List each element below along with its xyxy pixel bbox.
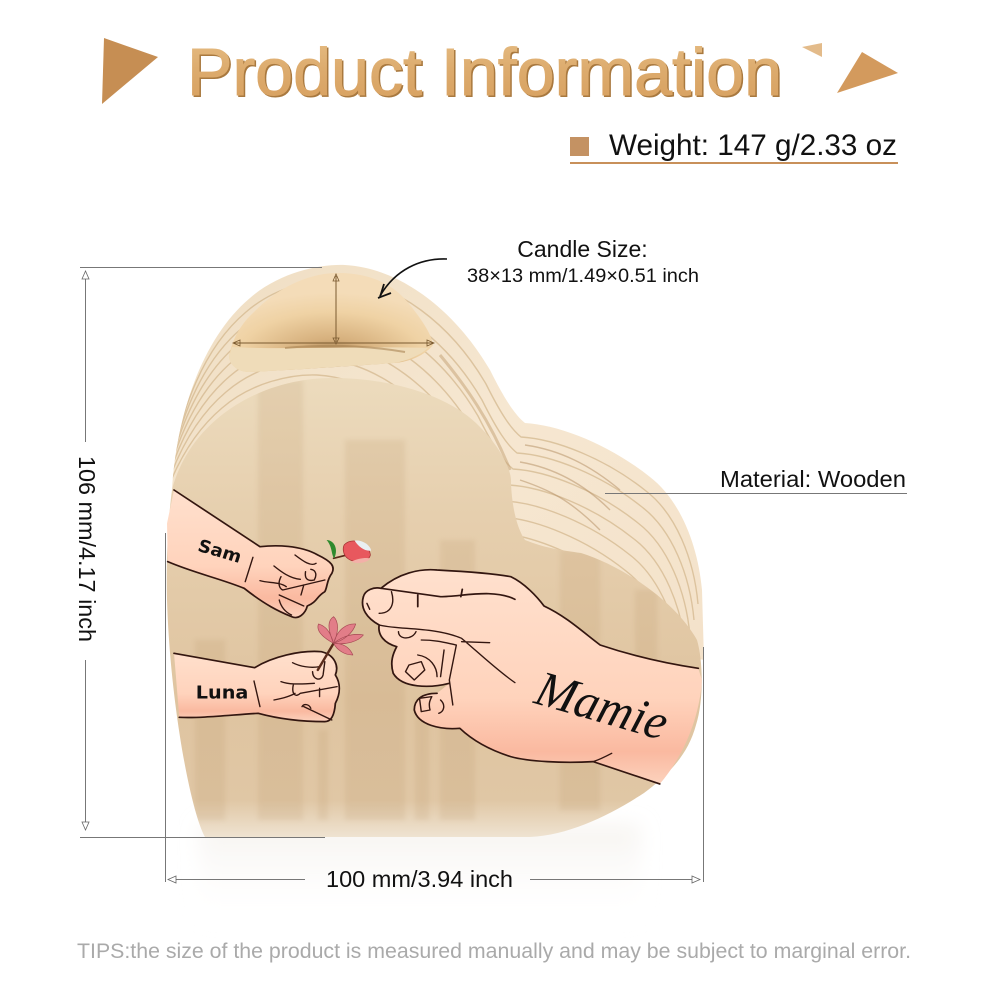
icon: small triangle	[802, 43, 822, 57]
weight spec: Weight: 147 g/2.33 oz	[609, 129, 897, 162]
width dimension: 100 mm/3.94 inch	[326, 866, 513, 892]
child hand: Sam	[167, 490, 333, 618]
heart front face	[167, 378, 702, 837]
title: Product Information	[188, 36, 784, 112]
flower: Luna	[318, 617, 363, 670]
adult hand: Mamie: Mamie	[528, 660, 675, 751]
candle slot	[229, 273, 434, 372]
wooden heart	[144, 265, 704, 837]
candle size label	[467, 236, 699, 287]
candle size label: Candle Size:	[517, 236, 648, 262]
adult hand: Mamie	[363, 570, 702, 784]
child hand: Luna	[174, 651, 339, 722]
shadow under product	[200, 825, 640, 925]
title: Product Information	[187, 35, 782, 110]
width dimension	[166, 533, 704, 892]
child hand: Sam: Sam	[195, 536, 244, 568]
height dimension	[74, 268, 325, 838]
arrow: candle slot pointer	[378, 259, 447, 298]
tips note: TIPS:the size of the product is measured manually and may be subject to marginal error.	[77, 940, 911, 963]
height dimension: 106 mm/4.17 inch	[74, 456, 100, 642]
icon: right triangle	[837, 52, 898, 93]
hands artwork	[167, 490, 702, 784]
candle size label: 38×13 mm/1.49×0.51 inch	[467, 265, 699, 287]
flower: Sam	[327, 540, 371, 563]
material label: Material: Wooden	[720, 466, 906, 492]
child hand: Luna: Luna	[196, 683, 248, 703]
infographic canvas	[78, 38, 910, 962]
icon: left triangle	[102, 38, 158, 104]
heart side	[172, 264, 704, 660]
